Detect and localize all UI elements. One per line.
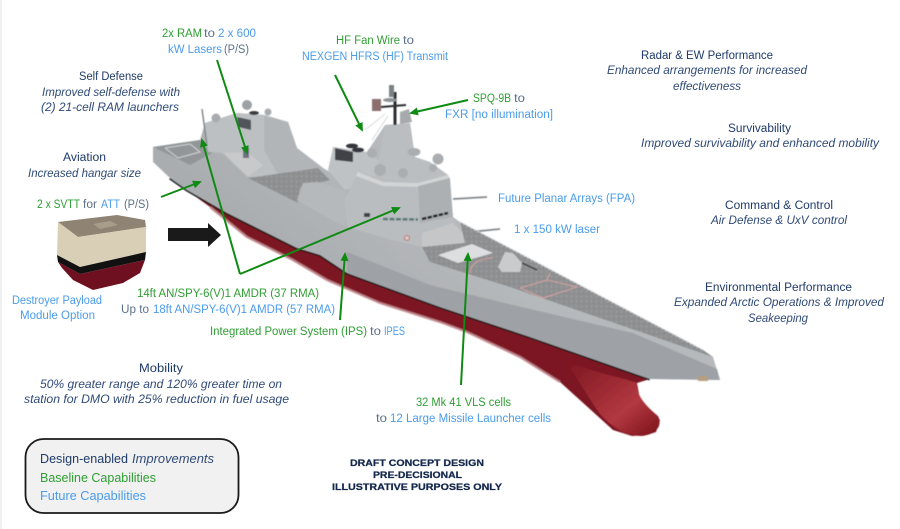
draft notice: DRAFT CONCEPT DESIGN (350, 458, 484, 469)
legend: Improvements (132, 451, 214, 466)
label: RAM to lasers: to (204, 28, 215, 40)
label: IPS to IPES: Integrated Power System (IPS) (210, 326, 367, 338)
label: Future Planar Arrays: Future Planar Arrays (FPA) (498, 193, 635, 205)
domes on superstructure (367, 148, 444, 178)
label: HF fan wire (302, 35, 449, 63)
text block: Self Defense: Self Defense (79, 71, 143, 83)
text block: Command and Control: Command & Control (725, 200, 833, 212)
legend: Future Capabilities (40, 488, 146, 503)
midships low block (297, 182, 347, 227)
label: AMDR: 18ft AN/SPY-6(V)1 AMDR (57 RMA) (153, 304, 335, 316)
label: RAM to lasers: kW Lasers (168, 44, 222, 56)
label: SVTT for ATT: for (83, 199, 97, 211)
label: VLS cells: to (376, 413, 387, 425)
draft notice: ILLUSTRATIVE PURPOSES ONLY (332, 482, 503, 493)
label: Destroyer payload module: Destroyer Payload (12, 295, 102, 307)
label: RAM to lasers (162, 28, 256, 56)
text block: Self Defense: Improved self-defense with (42, 87, 180, 99)
text block: Aviation (28, 152, 141, 180)
text block: Mobility: 50% greater range and 120% greater time on (40, 379, 282, 391)
text block: Self Defense: (2) 21-cell RAM launchers (41, 102, 179, 114)
aft superstructure (205, 113, 323, 178)
bulbous bow (565, 360, 660, 436)
draft notice (332, 458, 503, 493)
label: Destroyer payload module (12, 295, 102, 322)
legend (26, 439, 238, 513)
forward deck (422, 222, 713, 357)
label: VLS cells: 32 Mk 41 VLS cells (416, 397, 511, 409)
boot topping line (170, 178, 650, 379)
text block: Mobility: station for DMO with 25% reduction in fuel usage (24, 394, 289, 406)
red lower hull (170, 178, 660, 436)
text block: Survivability (641, 123, 880, 150)
ship illustration (153, 85, 720, 436)
label: HF fan wire: HF Fan Wire (336, 35, 400, 47)
arrow: module to ship (168, 223, 221, 247)
text block: Radar and EW (607, 50, 808, 93)
VLS cells (438, 244, 493, 263)
text block: Environmental Performance: Expanded Arctic Operations & Improved (674, 297, 885, 309)
payload module image (57, 215, 146, 290)
label: RAM to lasers: 2 x 600 (218, 28, 256, 40)
deckhouse extension (422, 223, 465, 247)
text block: Self Defense (41, 71, 180, 114)
label: IPS to IPES: to (370, 326, 381, 338)
main deckhouse (345, 172, 456, 247)
text block: Radar and EW: Radar & EW Performance (641, 50, 773, 62)
hull chine band (347, 252, 720, 380)
label: AMDR: Up to (121, 304, 149, 316)
text block: Survivability: Survivability (728, 123, 791, 135)
label: SVTT for ATT: ATT (101, 199, 120, 211)
text block: Survivability: Improved survivability and enhanced mobility (641, 138, 880, 150)
label: SVTT for ATT (37, 199, 149, 211)
legend: Design-enabled (40, 451, 128, 466)
label: HF fan wire: to (403, 35, 414, 47)
text block: Environmental Performance (674, 282, 885, 325)
text block: Radar and EW: Enhanced arrangements for increased (607, 65, 808, 77)
text block: Radar and EW: effectiveness (673, 81, 741, 93)
forward pyramid block (328, 147, 385, 190)
label: Destroyer payload module: Module Option (20, 310, 95, 322)
gray leader lines (453, 197, 487, 199)
text block: Command and Control (710, 200, 847, 227)
label: RAM to lasers: 2x RAM (162, 28, 202, 40)
text block: Aviation: Increased hangar size (28, 168, 141, 180)
green callout arrows (161, 60, 468, 385)
text block: Mobility (24, 363, 289, 406)
text block: Environmental Performance: Seakeeping (748, 313, 809, 325)
label: AMDR: 14ft AN/SPY-6(V)1 AMDR (37 RMA) (137, 288, 319, 300)
mast (365, 85, 412, 140)
label: VLS cells: 12 Large Missile Launcher cells (390, 413, 551, 425)
gun (498, 252, 522, 272)
text block: Aviation: Aviation (63, 152, 106, 164)
bridge windows (364, 213, 448, 240)
deck markings (470, 258, 577, 298)
tower (375, 123, 448, 190)
label: AMDR (121, 288, 335, 316)
text block: Mobility: Mobility (139, 363, 183, 375)
label: SPQ-9B: FXR [no illumination] (445, 109, 553, 121)
legend: Baseline Capabilities (40, 470, 156, 485)
label: SVTT for ATT: 2 x SVTT (37, 199, 80, 211)
label: SPQ-9B (445, 93, 553, 121)
draft notice: PRE-DECISIONAL (373, 470, 462, 481)
label: SPQ-9B: to (514, 93, 525, 105)
label: 150 kW laser: 1 x 150 kW laser (514, 224, 600, 236)
label: RAM to lasers: (P/S) (224, 44, 249, 56)
ship silhouette base (153, 113, 720, 380)
label: HF fan wire: NEXGEN HFRS (HF) Transmit (302, 51, 449, 63)
midships deck (248, 168, 330, 203)
label: VLS cells (376, 397, 551, 425)
text block: Command and Control: Air Defense & UxV control (710, 215, 847, 227)
text block: Environmental Performance: Environmental Performance (705, 282, 852, 294)
stern flight deck (153, 140, 212, 165)
label: IPS to IPES: IPES (384, 326, 405, 338)
label: SVTT for ATT: (P/S) (124, 199, 149, 211)
label: SPQ-9B: SPQ-9B (473, 93, 511, 105)
